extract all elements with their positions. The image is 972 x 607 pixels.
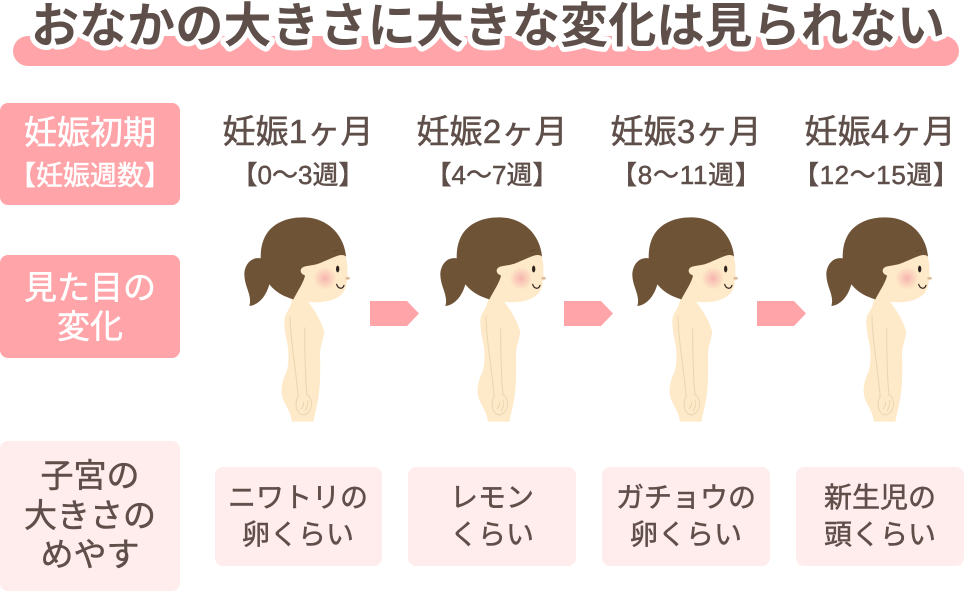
title text: おなかの大きさに大きな変化は見られない — [31, 0, 945, 53]
panel: size month 1: ニワトリの — [228, 482, 368, 513]
panel: row label pregnancy early stage — [0, 103, 180, 205]
heading: month 4 — [793, 113, 959, 190]
heading: month 3: 妊娠3ヶ月 — [610, 113, 762, 150]
illustration: woman month 2 — [440, 217, 546, 422]
heading: month 3: 【8～11週】 — [611, 160, 761, 190]
panel: size month 1 — [215, 467, 382, 566]
panel: row label visual change: 変化 — [57, 308, 123, 345]
panel: size month 4 — [796, 467, 964, 566]
panel: row label uterus size: 大きさの — [24, 497, 156, 534]
panel: row label visual change — [0, 255, 180, 358]
arrow 3 — [757, 301, 806, 326]
heading: month 3 — [610, 113, 762, 190]
panel: row label uterus size: 子宮の — [40, 457, 140, 494]
panel: size month 3: ガチョウの — [616, 482, 756, 513]
heading: month 2 — [416, 113, 568, 190]
arrow 2 — [564, 301, 613, 326]
panel: size month 2: レモン — [450, 482, 534, 513]
panel: size month 2 — [408, 467, 576, 566]
panel: row label visual change: 見た目の — [24, 269, 156, 306]
heading: month 1: 【0～3週】 — [232, 160, 364, 190]
heading: month 2: 【4～7週】 — [426, 160, 558, 190]
heading: month 1: 妊娠1ヶ月 — [222, 113, 374, 150]
panel: size month 4: 頭くらい — [824, 519, 936, 550]
panel: size month 3: 卵くらい — [630, 519, 742, 550]
panel: size month 4: 新生児の — [824, 482, 936, 513]
title underline pill — [13, 36, 959, 66]
title banner — [13, 0, 959, 66]
panel: row label pregnancy early stage: 【妊娠週数】 — [9, 161, 171, 191]
illustration: woman month 1 — [244, 217, 350, 422]
heading: month 2: 妊娠2ヶ月 — [416, 113, 568, 150]
panel: size month 2: くらい — [450, 519, 534, 550]
panel: size month 3 — [602, 467, 770, 566]
arrow 1 — [370, 301, 419, 326]
illustration: woman month 4 — [826, 217, 932, 422]
panel: row label uterus size — [0, 441, 180, 591]
heading: month 4: 【12～15週】 — [793, 160, 959, 190]
panel: row label pregnancy early stage: 妊娠初期 — [24, 114, 156, 151]
illustration: woman month 3 — [632, 217, 738, 422]
heading: month 4: 妊娠4ヶ月 — [804, 113, 956, 150]
heading: month 1 — [222, 113, 374, 190]
panel: size month 1: 卵くらい — [242, 519, 354, 550]
panel: row label uterus size: めやす — [40, 536, 140, 573]
